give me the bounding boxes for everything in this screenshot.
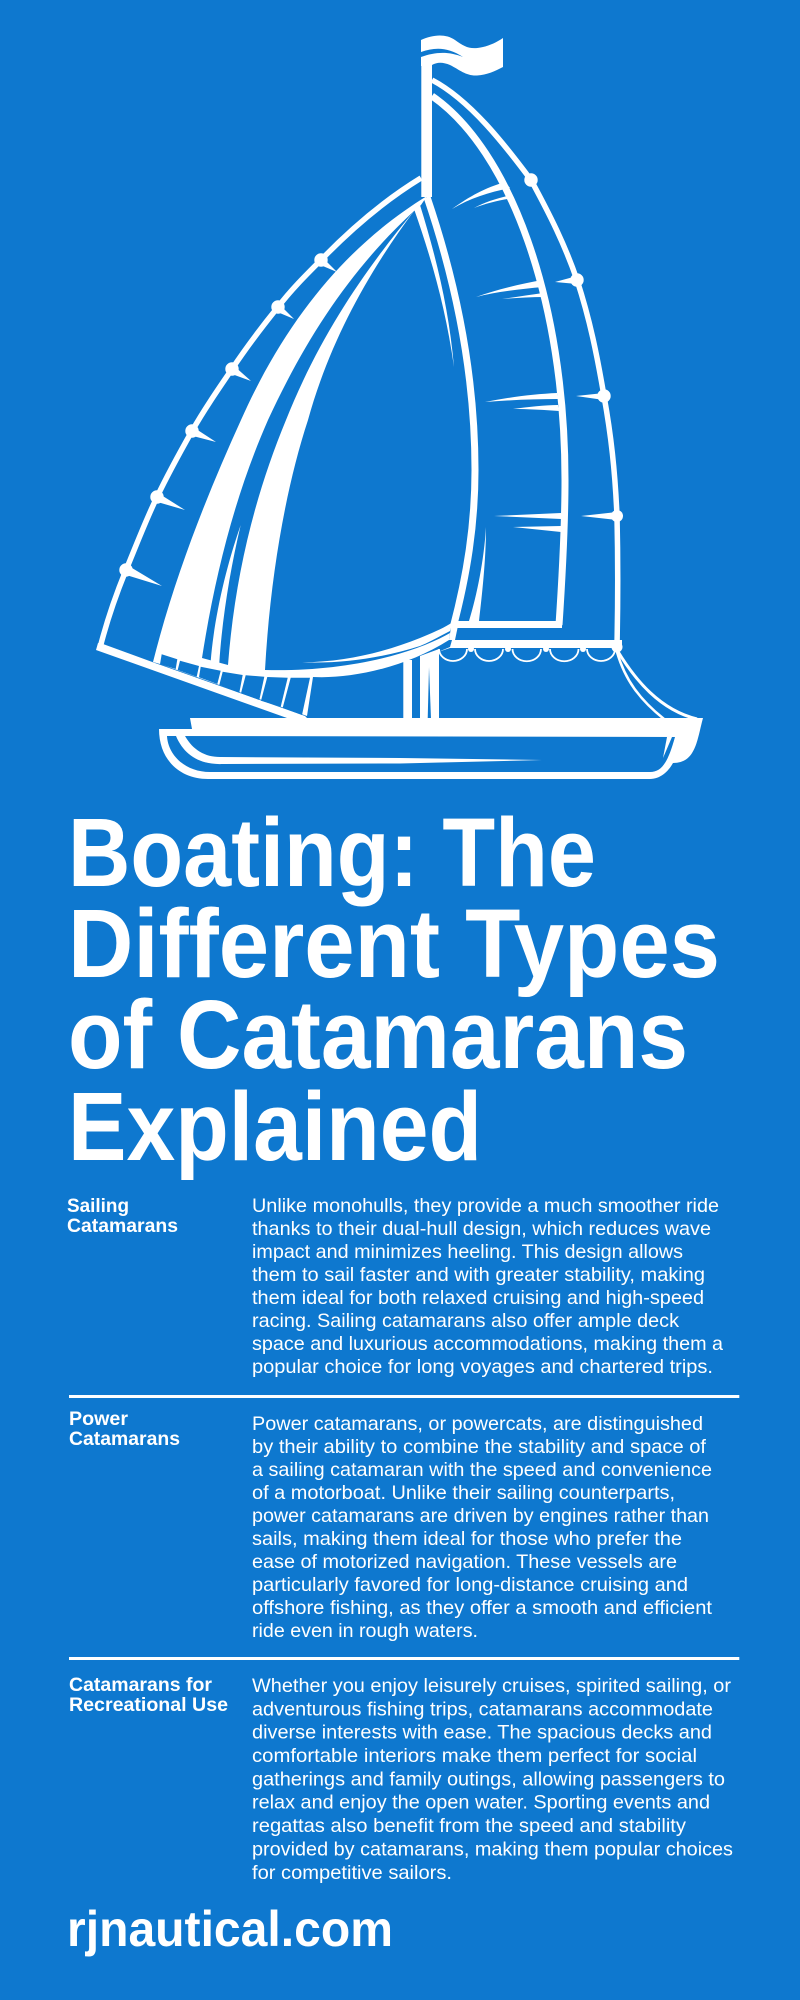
text block: sailing catamarans description: thanks to their dual-hull design, which reduces wave [252,1218,711,1240]
text block: sailing catamarans description: popular choice for long voyages and chartered trips. [252,1356,713,1378]
title: Boating: The [68,798,596,907]
main sail curves [414,96,565,640]
text block: power catamarans description: by their ability to combine the stability and space of [252,1436,707,1458]
text block: recreational use description: provided by catamarans, making them popular choices [252,1838,733,1860]
text block: power catamarans description: ride even in rough waters. [252,1620,478,1642]
cabin posts [403,649,439,719]
jib sail outer stay with batten nodes [100,178,421,648]
panel: power catamarans [69,1408,713,1642]
cabin awning with scallops [438,640,622,661]
panel: catamarans for recreational use [69,1674,733,1884]
title: Different Types [68,889,720,998]
heading: power catamarans [69,1408,180,1450]
stern stays [617,650,697,719]
panel: sailing catamarans [67,1195,723,1378]
jib sail white panels [153,196,453,716]
illustration: catamaran sailboat [96,35,703,779]
main sail battens [452,182,561,532]
text block: sailing catamarans description: space and luxurious accommodations, making them a [252,1333,723,1355]
text block: recreational use description: adventurous fishing trips, catamarans accommodate [252,1698,713,1720]
text block: recreational use description: relax and enjoy the open water. Sporting events and [252,1792,710,1814]
text block: recreational use description: comfortable interiors make them perfect for social [252,1745,697,1767]
text block: recreational use description: diverse interests with ease. The spacious decks and [252,1722,712,1744]
icon: flag and mast [421,35,503,197]
text block: power catamarans description: offshore fishing, as they offer a smooth and efficient [252,1597,713,1619]
text block: power catamarans description: Power catamarans, or powercats, are distinguished [252,1413,703,1435]
heading: sailing catamarans: Catamarans [67,1215,178,1237]
heading: power catamarans: Catamarans [69,1428,180,1450]
heading: catamarans for recreational use: Recreational Use [69,1694,228,1716]
text block: power catamarans description: power catamarans are driven by engines rather than [252,1505,709,1527]
text block: recreational use description: gatherings and family outings, allowing passengers to [252,1768,725,1790]
title: of Catamarans [68,980,688,1089]
text block: sailing catamarans description: impact and minimizes heeling. This design allows [252,1241,683,1263]
text block: recreational use description: Whether you enjoy leisurely cruises, spirited sailing, or [252,1675,732,1697]
text block: power catamarans description: sails, making them ideal for those who prefer the [252,1528,682,1550]
text block: sailing catamarans description: Unlike monohulls, they provide a much smoother ride [252,1195,719,1217]
text block: sailing catamarans description: racing. Sailing catamarans also offer ample deck [252,1310,679,1332]
text block: power catamarans description: particularly favored for long-distance cruising and [252,1574,688,1596]
text block: recreational use description [252,1675,733,1884]
title: Explained [68,1072,482,1181]
footer: website url: rjnautical.com [67,1901,393,1957]
text block: power catamarans description: a sailing catamaran with the speed and convenience [252,1459,712,1481]
text block: sailing catamarans description: them ideal for both relaxed cruising and high-speed [252,1287,704,1309]
jib sail foot ladder cells [160,654,310,715]
heading: sailing catamarans [67,1195,178,1237]
heading: catamarans for recreational use [69,1674,228,1716]
text block: power catamarans description: ease of motorized navigation. These vessels are [252,1551,677,1573]
heading: catamarans for recreational use: Catamarans for [69,1674,212,1696]
text block: sailing catamarans description [252,1195,723,1378]
main sail outer stay with batten nodes [432,80,623,645]
text block: sailing catamarans description: them to sail faster and with greater stability, making [252,1264,705,1286]
text block: recreational use description: regattas also benefit from the speed and stability [252,1815,686,1837]
text block: recreational use description: for competitive sailors. [252,1862,452,1884]
jib sail boom [96,643,307,718]
text block: power catamarans description [252,1413,713,1642]
title [68,798,720,1181]
heading: sailing catamarans: Sailing [67,1195,129,1217]
hull [159,718,703,779]
heading: power catamarans: Power [69,1408,128,1430]
text block: power catamarans description: of a motorboat. Unlike their sailing counterparts, [252,1482,675,1504]
